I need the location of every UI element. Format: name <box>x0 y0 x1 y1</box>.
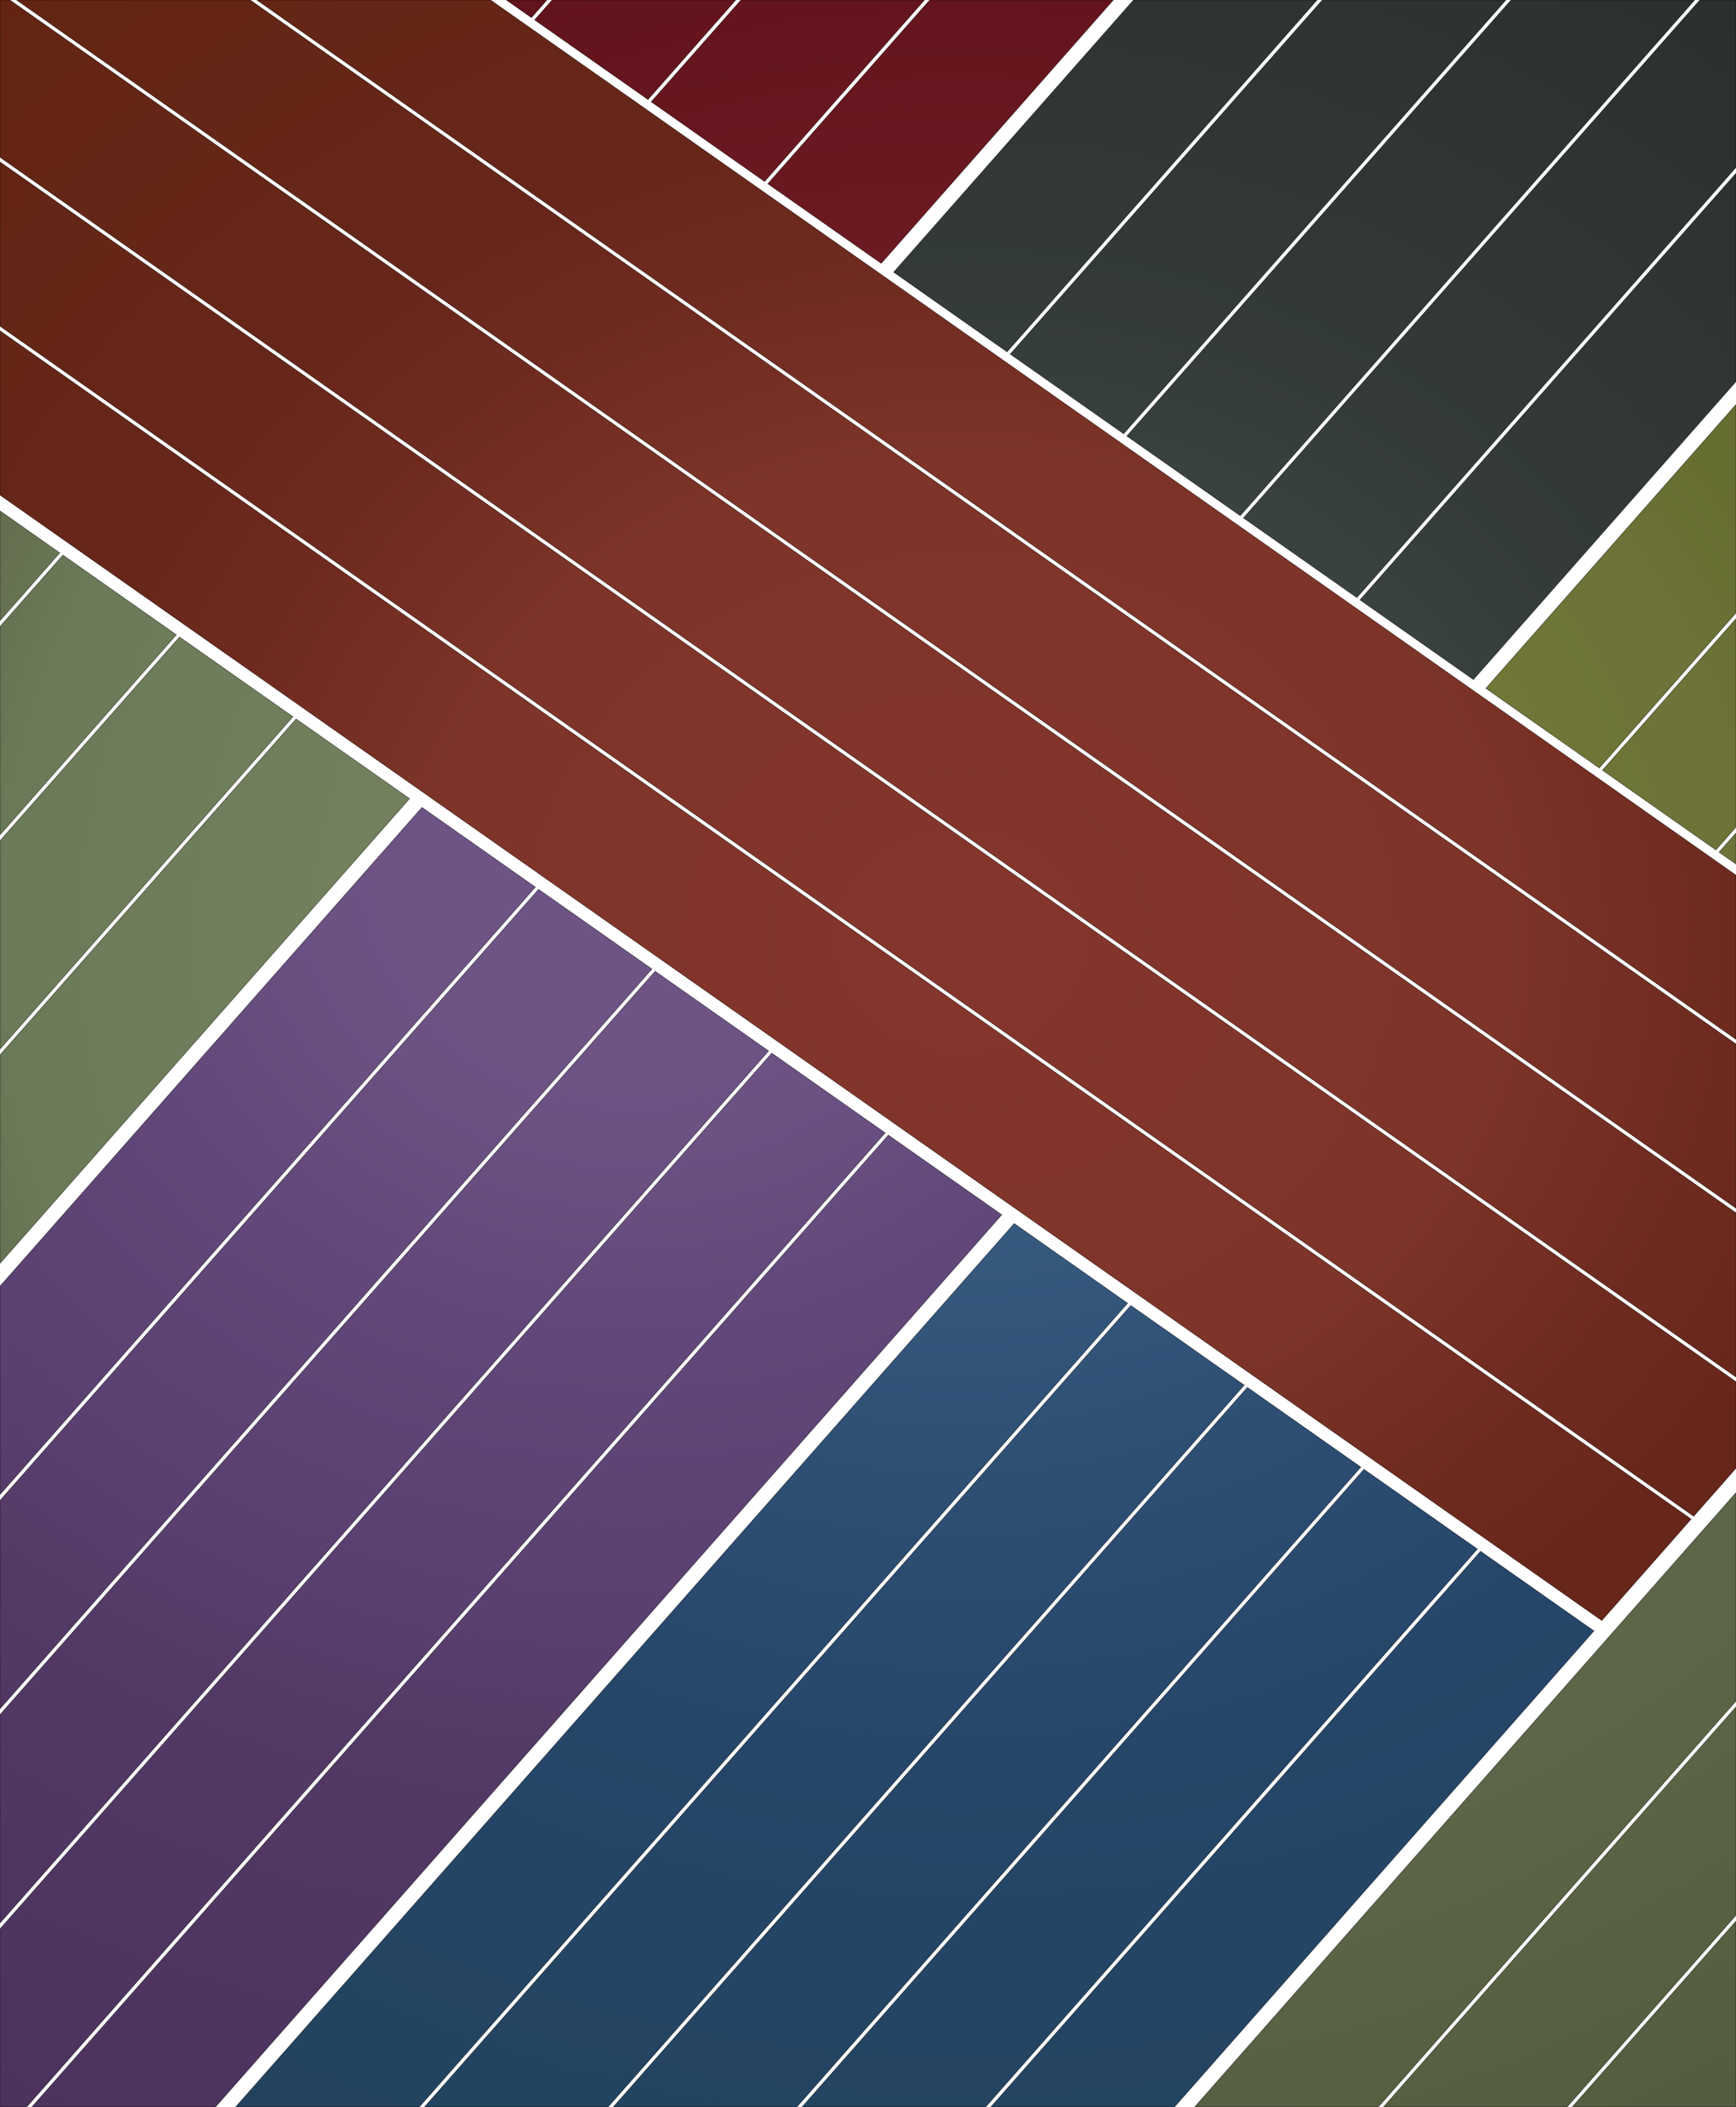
blue strip 5 <box>991 1551 1594 2107</box>
green strip 2 <box>0 555 177 835</box>
panel: moss green strips bottom right <box>1195 1493 1736 2107</box>
panel: charcoal grey strips top right <box>894 0 1736 680</box>
blue strip 4 <box>802 1469 1477 2107</box>
red strip 5 <box>0 331 1691 1621</box>
blue strip 3 <box>613 1387 1361 2107</box>
grey strip 4 <box>1243 0 1736 598</box>
panel: olive strips right <box>1486 405 1736 864</box>
panel: purple strips lower left <box>0 807 1002 2107</box>
blue strip 1 <box>236 1223 1128 2107</box>
panel: red-brown diagonal band <box>0 0 1736 1621</box>
purple strip 3 <box>0 971 769 1923</box>
olive strip 3 <box>1719 833 1736 864</box>
dark red strip 2 <box>535 0 736 99</box>
purple strip 4 <box>0 1053 885 2107</box>
moss strip 1 <box>1195 1493 1736 2107</box>
panel: sage green strips left <box>0 511 410 1263</box>
green strip 3 <box>0 637 293 1049</box>
grey strip 3 <box>1127 0 1695 516</box>
green strip 1 <box>0 511 60 621</box>
olive strip 2 <box>1602 619 1736 850</box>
moss strip 2 <box>1383 1707 1736 2107</box>
purple strip 1 <box>0 807 536 1495</box>
grey strip 5 <box>1360 173 1736 680</box>
red strip 1 <box>257 0 1736 1040</box>
red strip 2 <box>16 0 1736 1208</box>
dark red strip 3 <box>651 0 924 182</box>
panel: blue strips bottom <box>236 1223 1594 2107</box>
purple strip 2 <box>0 889 652 1709</box>
grey strip 1 <box>894 0 1317 352</box>
red strip 3 <box>0 0 1736 1377</box>
purple strip 5 <box>32 1135 1002 2107</box>
moss strip 3 <box>1572 1921 1736 2107</box>
red strip 4 <box>0 162 1736 1516</box>
grey strip 2 <box>1010 0 1506 434</box>
green strip 4 <box>0 719 410 1263</box>
olive strip 1 <box>1486 405 1736 768</box>
dark red strip 1 <box>506 0 547 18</box>
panel: dark red strips top <box>506 0 1113 263</box>
blue strip 2 <box>424 1305 1244 2107</box>
dark red strip 4 <box>768 0 1113 263</box>
